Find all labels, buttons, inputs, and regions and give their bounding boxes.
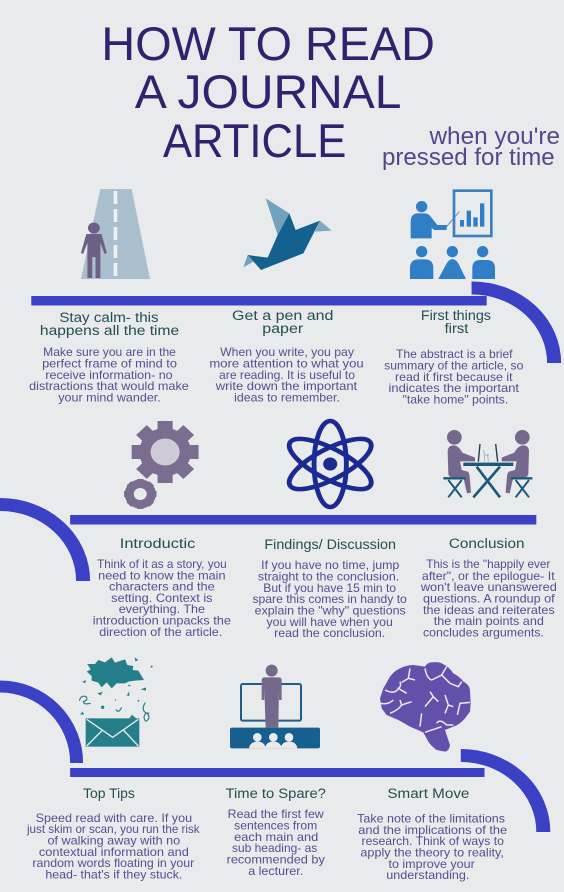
panel: top tips: random words floating in your (32, 856, 194, 870)
panel: smart move: to improve your (388, 857, 475, 871)
panel: get a pen and paper: are reading. It is useful to (219, 368, 355, 382)
panel: conclusion: the ideas and reiterates (423, 603, 555, 617)
panel: first things first: summary of the article, so (384, 359, 524, 372)
panel: stay calm (29, 310, 189, 404)
panel: introduction: everything. The (119, 602, 205, 616)
panel: stay calm: distractions that would make (29, 379, 189, 393)
panel: first things first: First things (421, 308, 491, 324)
panel: conclusion: concludes arguments. (423, 626, 544, 639)
panel: findings and discussion: If you have no time, jump (261, 558, 400, 572)
panel: time to spare: sentences from (234, 819, 317, 832)
panel: top tips (26, 786, 201, 881)
icon: person on stage with audience (230, 665, 320, 748)
panel: top tips: Top Tips (83, 786, 135, 802)
panel: smart move: and the implications of the (358, 823, 507, 837)
panel: introduction: direction of the article. (99, 625, 222, 639)
panel: get a pen and paper: ideas to remember. (234, 391, 340, 404)
panel: findings and discussion: you will have when you (267, 615, 393, 629)
panel: get a pen and paper: Get a pen and (232, 308, 333, 324)
panel: conclusion: questions. A roundup of (423, 592, 555, 605)
panel: findings and discussion: explain the "why" questions (255, 604, 406, 617)
path line: middle row (0, 504, 536, 581)
panel: top tips: contextual information and (39, 845, 189, 859)
panel: findings and discussion: straight to the conclusion. (258, 570, 399, 583)
icon: brain (380, 662, 471, 752)
panel: first things first: "take home" points. (403, 393, 508, 406)
panel: conclusion: This is the "happily ever (426, 557, 550, 571)
panel: get a pen and paper (209, 308, 364, 404)
panel: conclusion: after", or the epilogue- It (422, 569, 555, 583)
title (101, 18, 435, 168)
panel: smart move: Smart Move (387, 786, 469, 802)
icon: two people at a table (443, 430, 532, 497)
panel: introduction: Think of it as a story, you (97, 557, 227, 571)
panel: first things first: The abstract is a brief (396, 347, 513, 361)
panel: top tips: just skim or scan, you run the risk (26, 822, 201, 836)
panel: findings and discussion: But if you have 15 min to (263, 581, 396, 595)
panel: findings and discussion: read the conclusion. (274, 626, 385, 640)
panel: smart move: understanding. (386, 868, 469, 882)
path line: top row (31, 288, 554, 363)
panel: time to spare: Time to Spare? (226, 786, 326, 802)
panel: introduction: characters and the (109, 580, 215, 593)
panel: stay calm: perfect frame of mind to (42, 357, 177, 370)
panel: smart move (357, 786, 507, 882)
panel: time to spare: a lecturer. (248, 864, 303, 878)
panel: smart move: research. Think of ways to (361, 834, 504, 848)
icon: origami bird (243, 198, 332, 270)
panel: time to spare: recommended by (227, 853, 325, 866)
panel: get a pen and paper: write down the important (215, 379, 358, 393)
panel: introduction: introduction unpacks the (93, 614, 231, 627)
title: ARTICLE (163, 115, 346, 168)
title: HOW TO READ (101, 18, 435, 71)
panel: get a pen and paper: more attention to what you (209, 357, 364, 370)
panel: top tips: Speed read with care. If you (36, 811, 192, 825)
panel: stay calm: happens all the time (40, 323, 179, 339)
panel: conclusion: won't leave unanswered (420, 580, 557, 594)
title: A JOURNAL (135, 66, 401, 119)
panel: conclusion: the main points and (434, 614, 544, 628)
icon: envelope with burst and confetti (79, 657, 153, 747)
panel: introduction: setting. Context is (111, 591, 213, 605)
panel: get a pen and paper: paper (262, 321, 303, 337)
panel: smart move: Take note of the limitations (357, 812, 505, 825)
subtitle (382, 123, 560, 171)
panel: findings and discussion: spare this comes in handy to (253, 592, 407, 606)
icon: gears (124, 421, 199, 509)
panel: conclusion (420, 536, 557, 639)
panel: smart move: apply the theory to reality, (360, 846, 504, 859)
panel: top tips: of walking away with no (47, 834, 181, 847)
panel: findings and discussion: Findings/ Discussion (264, 537, 396, 553)
panel: introduction: Introductic (120, 536, 195, 552)
panel: time to spare: each main and (234, 830, 318, 844)
panel: time to spare (226, 786, 326, 878)
panel: time to spare: Read the first few (228, 807, 324, 821)
panel: stay calm: Stay calm- this (59, 310, 159, 326)
panel: time to spare: sub heading- as (232, 841, 317, 855)
panel: stay calm: receive information- no (45, 368, 173, 382)
panel: stay calm: Make sure you are in the (43, 345, 176, 359)
icon: presenter and audience (410, 191, 495, 279)
subtitle: pressed for time (382, 144, 555, 171)
path line: bottom row (0, 686, 543, 832)
panel: introduction (93, 536, 231, 639)
panel: first things first: first (445, 321, 468, 337)
panel: conclusion: Conclusion (449, 536, 524, 552)
panel: top tips: head- that's if they stuck. (45, 868, 182, 881)
panel: stay calm: your mind wander. (58, 391, 161, 404)
icon: atom (282, 421, 378, 507)
panel: first things first: indicates the important (388, 381, 520, 395)
panel: introduction: need to know the main (98, 569, 226, 582)
panel: findings and discussion (253, 537, 407, 640)
panel: first things first (384, 308, 524, 406)
panel: get a pen and paper: When you write, you pay (220, 345, 354, 359)
icon: road with person (81, 189, 150, 279)
panel: first things first: read it first because it (395, 370, 513, 384)
